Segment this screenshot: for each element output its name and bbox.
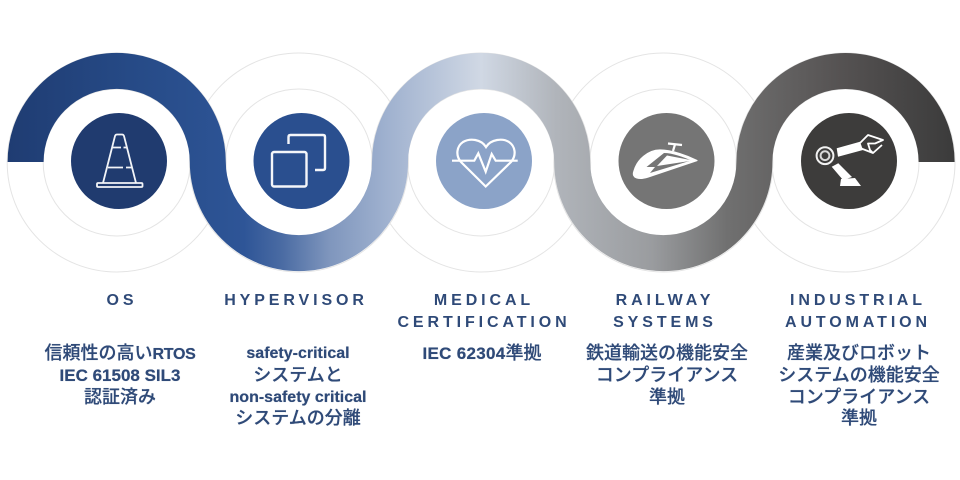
serpentine ribbon — [26, 71, 937, 253]
heading: systems: SYSTEMS — [613, 314, 717, 331]
text: industrial line 1: 産業及びロボット — [787, 343, 931, 363]
text: OS line 1: 信頼性の高いRTOS — [45, 343, 195, 363]
text: railway line 2: コンプライアンス — [596, 365, 738, 385]
text: industrial line 3: コンプライアンス — [788, 387, 930, 407]
icon: bullet train — [618, 113, 714, 209]
text: industrial line 2: システムの機能安全 — [778, 365, 940, 385]
column: industrial description — [778, 343, 940, 428]
text: railway line 3: 準拠 — [649, 387, 685, 407]
text: hypervisor line 4: システムの分離 — [235, 408, 361, 428]
heading: automation: AUTOMATION — [785, 314, 931, 331]
column: hypervisor description — [230, 345, 366, 428]
column: industrial automation — [785, 292, 931, 331]
column: railway description — [586, 343, 748, 407]
heading: OS: OS — [107, 292, 137, 309]
heading: certification: CERTIFICATION — [397, 314, 571, 331]
heading: medical: MEDICAL — [434, 292, 534, 309]
column: railway systems — [613, 292, 717, 331]
text: industrial line 4: 準拠 — [841, 408, 877, 428]
text: hypervisor line 1: safety-critical — [246, 345, 350, 362]
text: OS line 3: 認証済み — [84, 387, 156, 407]
text: OS line 2: IEC 61508 SIL3 — [60, 366, 180, 385]
column: OS description — [44, 343, 196, 407]
icon: robot arm — [801, 113, 897, 209]
icon: overlapping squares — [254, 113, 350, 209]
heading: railway: RAILWAY — [616, 292, 714, 309]
icon: traffic cone — [71, 113, 167, 209]
text: hypervisor line 2: システムと — [253, 365, 343, 385]
icon: heart with pulse — [436, 113, 532, 209]
heading: hypervisor: HYPERVISOR — [224, 292, 368, 309]
column: medical certification — [397, 292, 571, 363]
text: railway line 1: 鉄道輸送の機能安全 — [586, 343, 748, 363]
text: hypervisor line 3: non-safety critical — [230, 389, 366, 406]
text: medical line 1: IEC 62304準拠 — [422, 343, 542, 363]
heading: industrial: INDUSTRIAL — [790, 292, 926, 309]
